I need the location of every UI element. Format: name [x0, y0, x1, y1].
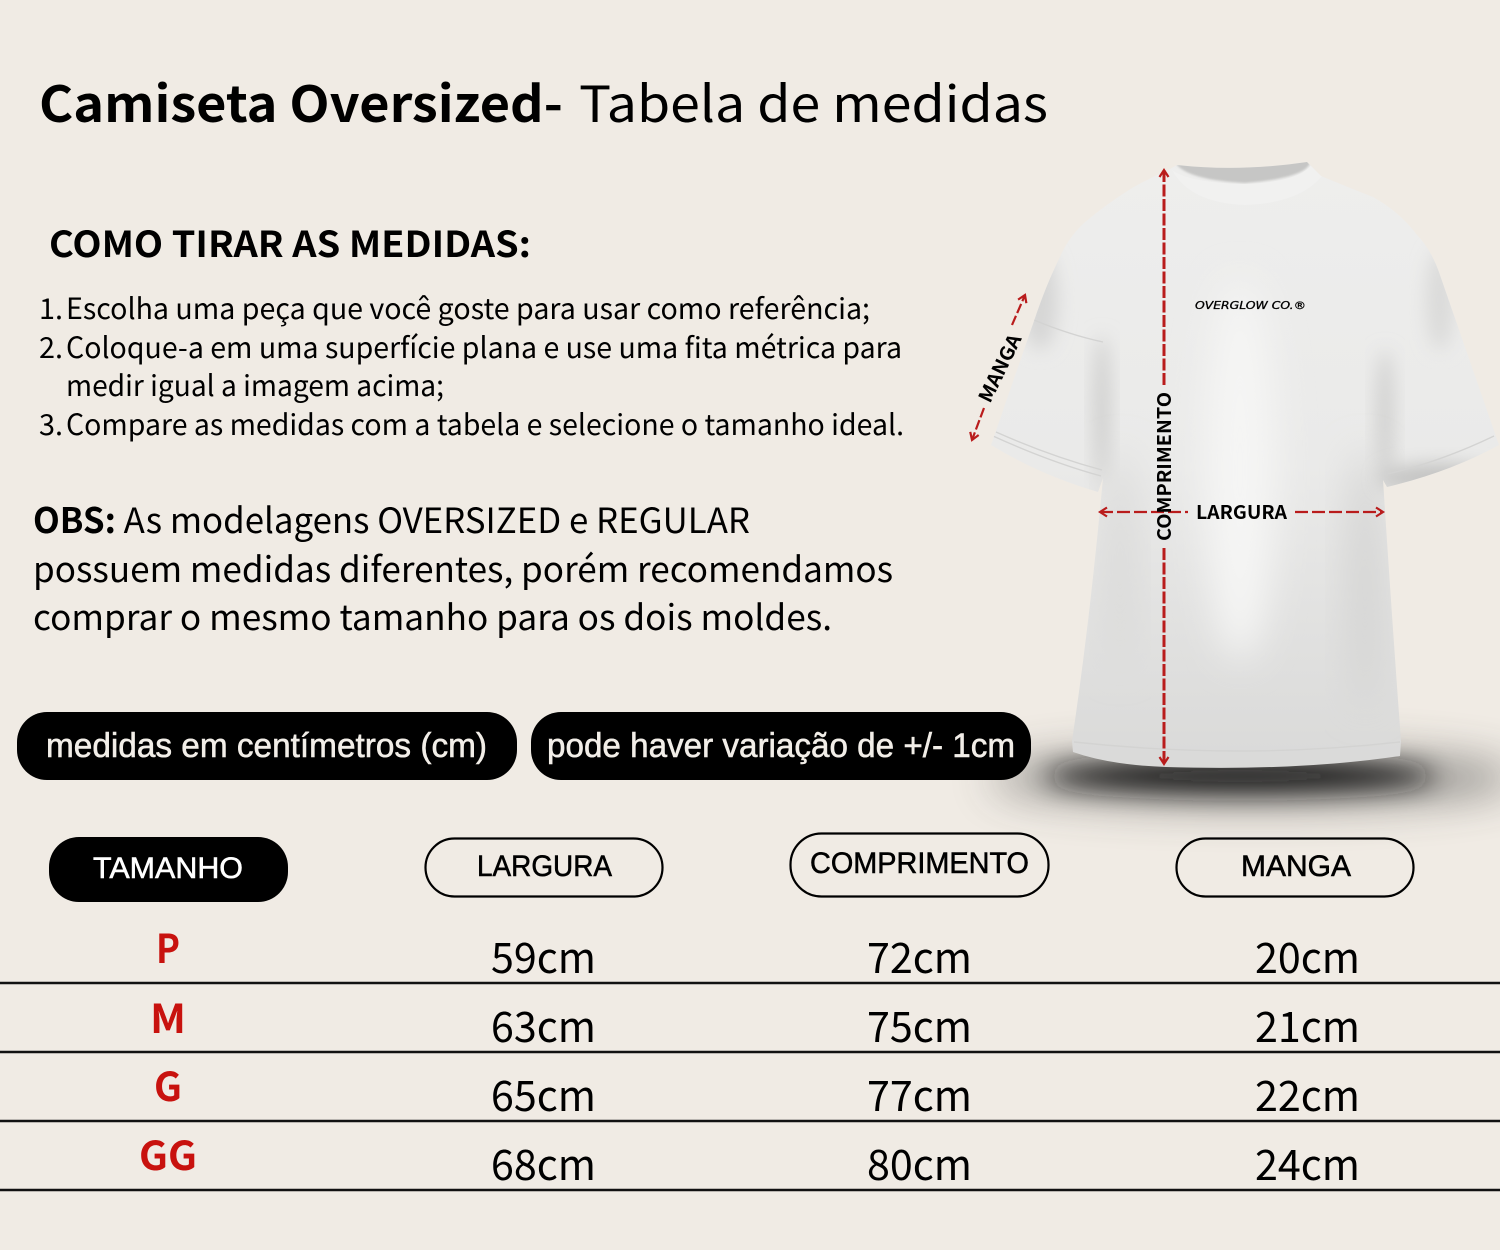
row P: 72cm: [867, 925, 972, 986]
row G: 22cm: [1255, 1063, 1360, 1124]
row G: 65cm: [491, 1063, 596, 1124]
t-shirt illustration: [971, 155, 1500, 804]
title: [39, 65, 1048, 137]
brand label: OVERGLOW CO.®: [1195, 300, 1306, 312]
shirt silhouette with shading: [980, 155, 1500, 775]
pill: medidas em centímetros: medidas em centímetros (cm): [46, 727, 487, 765]
row M: 63cm: [491, 994, 596, 1055]
seams: [994, 326, 1494, 476]
row GG: 24cm: [1255, 1132, 1360, 1193]
observation note: comprar o mesmo tamanho para os dois moldes.: [33, 590, 832, 641]
row lines: [0, 983, 1500, 1190]
label: comprimento: COMPRIMENTO: [1150, 392, 1177, 541]
table: [0, 834, 1500, 1193]
label: manga: MANGA: [971, 328, 1028, 407]
observation note: [33, 493, 893, 641]
instructions list: Coloque-a em uma superfície plana e use uma fita métrica para: [66, 325, 902, 367]
heading: como tirar as medidas: COMO TIRAR AS MEDIDAS:: [49, 216, 531, 268]
instructions list: [39, 286, 904, 444]
instructions list: medir igual a imagem acima;: [66, 363, 444, 405]
header: tamanho: TAMANHO: [93, 852, 243, 885]
instructions list: 3.: [39, 402, 63, 444]
header: manga: [1176, 838, 1414, 896]
row P: [156, 917, 1360, 986]
arrow: manga: [972, 295, 1025, 440]
row M: 21cm: [1255, 994, 1360, 1055]
header: comprimento: COMPRIMENTO: [810, 847, 1029, 880]
header: manga: MANGA: [1241, 850, 1351, 883]
pill: medidas em centímetros: [17, 712, 517, 780]
row G: [154, 1055, 1360, 1124]
row P: 59cm: [491, 925, 596, 986]
row M: [150, 987, 1360, 1055]
instructions list: Escolha uma peça que você goste para usar como referência;: [66, 286, 870, 328]
title: Tabela de medidas: [579, 65, 1048, 137]
row GG: [139, 1124, 1360, 1193]
collar rib: [1244, 184, 1246, 185]
instructions list: Compare as medidas com a tabela e selecione o tamanho ideal.: [66, 402, 904, 444]
row GG: 68cm: [491, 1132, 596, 1193]
label: largura: LARGURA: [1196, 498, 1288, 525]
row GG: 80cm: [867, 1132, 972, 1193]
observation note: possuem medidas diferentes, porém recomendamos: [33, 542, 893, 593]
pill: variação: [531, 712, 1031, 780]
row GG: GG: [139, 1124, 197, 1182]
row M: M: [150, 987, 186, 1045]
header: largura: LARGURA: [477, 850, 612, 883]
row P: 20cm: [1255, 925, 1360, 986]
pill: variação: pode haver variação de +/- 1cm: [547, 727, 1015, 765]
instructions list: 2.: [39, 325, 63, 367]
title: Camiseta Oversized-: [39, 65, 563, 137]
header: largura: [426, 838, 662, 896]
neck inner: [1177, 162, 1310, 184]
row M: 75cm: [867, 994, 972, 1055]
arrow: comprimento: [1162, 170, 1166, 764]
ground shadow: [990, 752, 1500, 804]
arrow: largura: [1100, 511, 1383, 513]
instructions list: 1.: [39, 286, 63, 328]
observation note: OBS: As modelagens OVERSIZED e REGULAR: [33, 493, 750, 544]
row G: G: [154, 1055, 182, 1113]
header: tamanho: [49, 837, 288, 902]
row P: P: [156, 917, 180, 975]
header: comprimento: [790, 834, 1048, 896]
row G: 77cm: [867, 1063, 972, 1124]
